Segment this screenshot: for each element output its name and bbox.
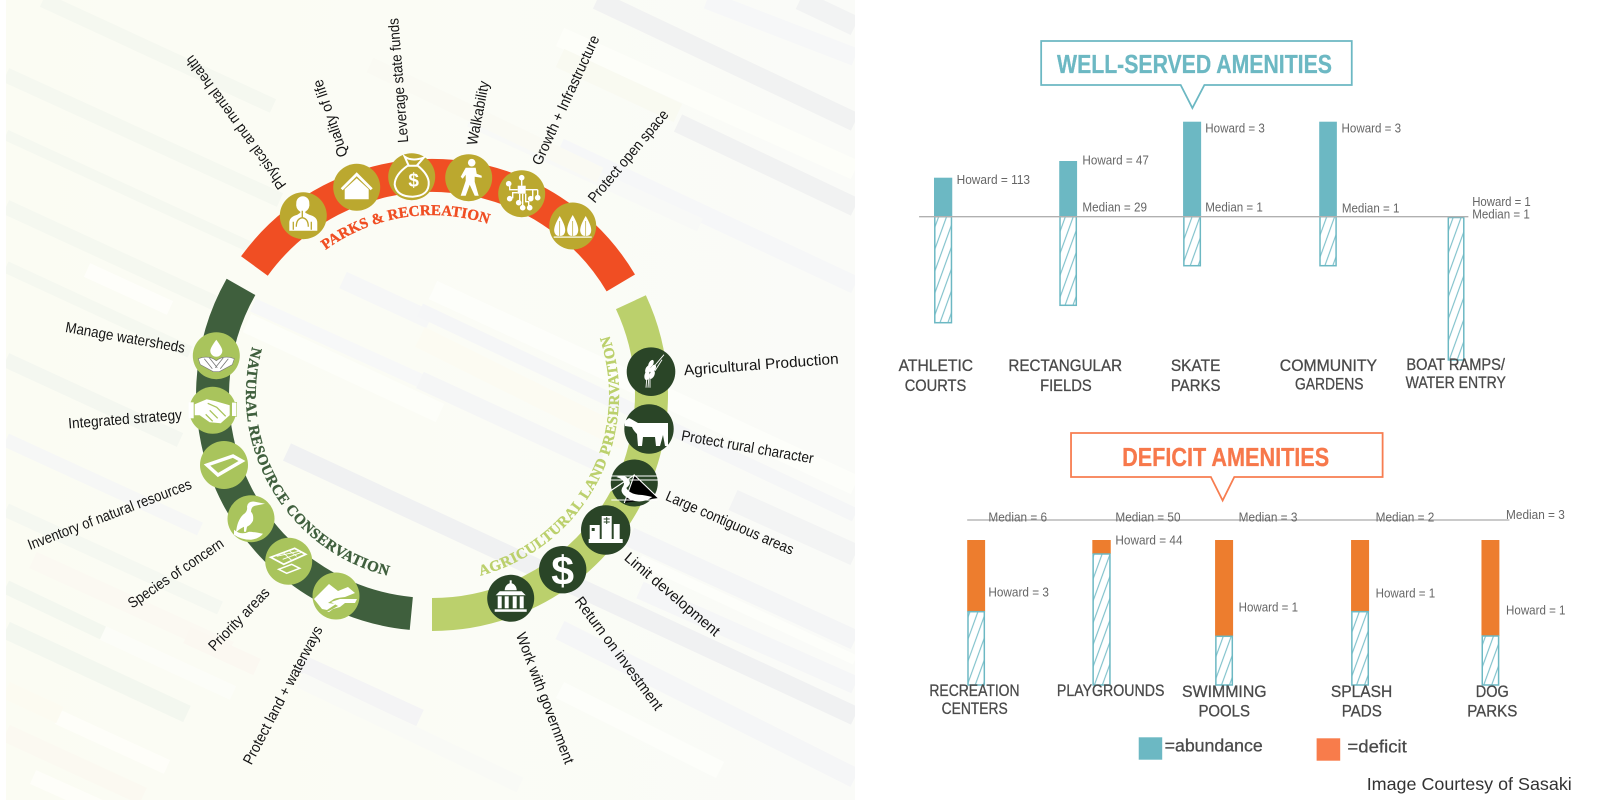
label: work with government: Work with government: [512, 630, 577, 767]
background panel with diagonal stripes: [6, 0, 855, 800]
label: physical and mental health: Physical and mental health: [182, 52, 290, 192]
value labels: Median = 3: [1239, 510, 1297, 525]
callout: deficit amenities: [1071, 433, 1383, 500]
value labels: Median = 1: [1472, 207, 1530, 222]
label: agricultural production: Agricultural Production: [683, 351, 839, 379]
icon: return on investment dollar: $: [551, 548, 574, 594]
value labels: Howard = 47: [1082, 152, 1149, 167]
value labels: Median = 1: [1342, 200, 1399, 215]
heading: natural resource conservation: NATURAL RESOURCE CONSERVATION: [246, 346, 390, 576]
category labels: CENTERS: [942, 699, 1008, 718]
icon: inventory of natural resources: [200, 441, 248, 489]
icon group: parks and recreation: [280, 153, 596, 250]
value labels: Howard = 3: [1342, 120, 1401, 135]
bar: rectangular fields: [1059, 161, 1077, 305]
icon: leverage state funds money bag: $: [408, 171, 419, 192]
value labels: [988, 507, 1565, 617]
value labels: Howard = 44: [1115, 532, 1183, 547]
value labels: Median = 1: [1205, 200, 1263, 215]
value labels: [957, 120, 1531, 222]
category labels: PLAYGROUNDS: [1057, 681, 1164, 700]
legend: deficit: =deficit: [1347, 737, 1407, 757]
icon: large contiguous areas: [610, 460, 658, 506]
category labels: WATER ENTRY: [1406, 373, 1506, 392]
label: return on investment: Return on investment: [571, 594, 667, 714]
icon: agricultural production wheat: [627, 347, 675, 396]
icon: protect rural character cow: [624, 404, 674, 454]
category labels: SPLASH: [1331, 682, 1392, 701]
value labels: Median = 2: [1376, 510, 1434, 525]
category labels: ATHLETIC: [899, 356, 973, 375]
category labels: DOG: [1476, 682, 1509, 701]
label: walkability: Walkability: [464, 79, 493, 147]
bar: boat ramps: [1448, 218, 1464, 360]
callout: well-served amenities: [1041, 41, 1352, 108]
icon: work with government capitol: [487, 575, 534, 622]
category labels: COURTS: [905, 376, 966, 395]
category labels: RECREATION: [929, 681, 1020, 700]
value labels: Howard = 113: [957, 172, 1030, 187]
callout: deficit amenities: DEFICIT AMENITIES: [1122, 444, 1329, 472]
label: species of concern: Species of concern: [125, 535, 227, 612]
value labels: Howard = 1: [1472, 194, 1531, 209]
icon: physical and mental health: [280, 192, 327, 239]
bar: splash pads: [1351, 540, 1369, 685]
icon group: natural resource conservation: [189, 332, 360, 620]
label: inventory of natural resources: Inventory of natural resources: [25, 476, 194, 554]
label: integrated strategy: Integrated strategy: [68, 407, 183, 432]
icon: growth and infrastructure network: [498, 170, 545, 217]
bar: swimming pools: [1215, 540, 1233, 685]
value labels: Howard = 1: [1239, 599, 1298, 614]
category labels: FIELDS: [1040, 376, 1092, 395]
chart: well-served amenities: [899, 120, 1531, 395]
category labels: RECTANGULAR: [1008, 356, 1122, 375]
ring: parks and recreation arc: [254, 175, 621, 283]
category labels: [929, 681, 1517, 721]
labels: parks and recreation: [182, 17, 672, 206]
category labels: PARKS: [1467, 702, 1517, 721]
heading: agricultural land preservation: AGRICULTURAL LAND PRESERVATION: [480, 336, 620, 576]
label: priority areas: Priority areas: [205, 584, 273, 655]
icon: manage watersheds hands and drop: [193, 332, 240, 379]
label: protect land and waterways: Protect land + waterways: [240, 623, 326, 767]
credit: Image Courtesy of Sasaki: [1367, 774, 1572, 794]
legend: abundance: =abundance: [1165, 736, 1263, 756]
icon: leverage state funds money bag: [388, 153, 435, 200]
label: quality of life: Quality of life: [310, 77, 352, 159]
labels: agricultural land preservation: [512, 351, 839, 767]
category labels: POOLS: [1198, 702, 1250, 721]
label: protect rural character: Protect rural character: [680, 427, 815, 467]
label: protect open space: Protect open space: [585, 107, 672, 206]
ring: agricultural land preservation arc: [432, 302, 651, 614]
icon: limit development city: [581, 505, 630, 555]
labels: natural resource conservation: [25, 319, 326, 767]
category labels: GARDENS: [1295, 374, 1363, 394]
category labels: [899, 355, 1506, 395]
icon: species of concern heron: [228, 495, 274, 542]
value labels: Howard = 1: [1506, 602, 1565, 617]
label: large contiguous areas: Large contiguous areas: [663, 488, 796, 558]
category labels: COMMUNITY: [1280, 356, 1377, 375]
icon: priority areas: [265, 538, 312, 585]
bar: playgrounds: [1092, 540, 1111, 685]
value labels: Median = 3: [1506, 507, 1565, 522]
label: limit development: Limit development: [621, 549, 724, 640]
bar: dog parks: [1481, 540, 1499, 685]
category labels: SKATE: [1171, 356, 1220, 375]
value labels: Howard = 3: [988, 584, 1049, 599]
legend: deficit: [1317, 737, 1407, 761]
icon: quality of life house: [333, 164, 380, 211]
label: growth and infrastructure: Growth + Infrastructure: [529, 33, 603, 168]
bar: recreation centers: [967, 540, 985, 685]
icon: protect land and waterways: [312, 572, 360, 620]
value labels: Median = 29: [1082, 200, 1147, 215]
icon: return on investment dollar: [539, 546, 586, 594]
icon: integrated strategy handshake: [189, 387, 237, 434]
legend: [1139, 736, 1407, 761]
value labels: Median = 50: [1115, 510, 1181, 525]
heading: parks and recreation: PARKS & RECREATION: [320, 205, 491, 250]
label: leverage state funds: Leverage state funds: [385, 17, 412, 143]
label: manage watersheds: Manage watersheds: [64, 319, 186, 357]
bar: skate parks: [1183, 122, 1201, 266]
legend: abundance: [1139, 736, 1263, 760]
bar: athletic courts: [934, 178, 952, 323]
bar: community gardens: [1319, 122, 1337, 266]
category labels: PARKS: [1171, 376, 1220, 395]
ring: natural resource conservation arc: [213, 287, 411, 614]
icon: walkability pedestrian: [445, 154, 492, 201]
value labels: Howard = 3: [1205, 120, 1265, 135]
category labels: SWIMMING: [1182, 682, 1267, 701]
icon: protect open space trees: [549, 202, 596, 250]
value labels: Howard = 1: [1376, 585, 1435, 600]
icon group: agricultural land preservation: [487, 347, 675, 622]
category labels: PADS: [1342, 702, 1382, 721]
chart: deficit amenities: [929, 507, 1565, 721]
value labels: Median = 6: [988, 510, 1047, 525]
callout: well-served amenities: WELL-SERVED AMENITIES: [1057, 51, 1332, 79]
category labels: BOAT RAMPS/: [1406, 355, 1505, 374]
